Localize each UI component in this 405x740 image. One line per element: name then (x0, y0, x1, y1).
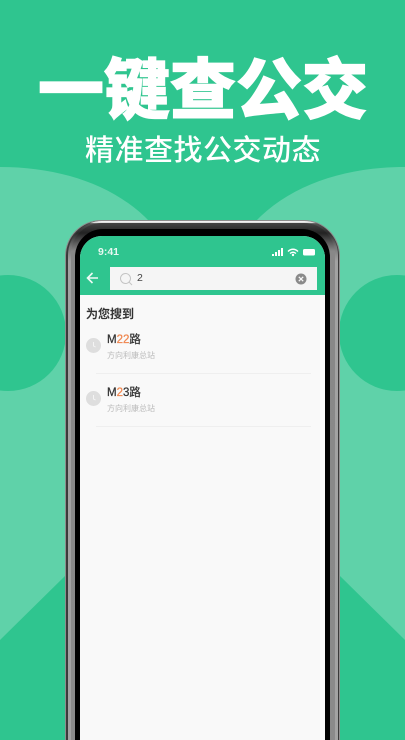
black bezel (75, 229, 330, 740)
divider (96, 373, 311, 374)
inner stripe (70, 223, 334, 740)
search box (110, 267, 317, 290)
route name: M23路 (107, 387, 141, 399)
subtitle: 精准查找公交动态 (85, 135, 321, 167)
screen (80, 236, 325, 740)
route name: M22路 (107, 334, 141, 346)
status icons (272, 248, 315, 256)
clock icon (86, 391, 101, 406)
result 2 (86, 386, 311, 427)
results heading: 为您搜到 (86, 307, 134, 321)
clear icon (296, 274, 306, 284)
outer dark rim (66, 221, 339, 740)
metal band (68, 221, 338, 740)
title: 一键查公交 (38, 53, 368, 127)
phone (65, 220, 340, 740)
clock icon (86, 338, 101, 353)
status time: 9:41 (98, 246, 119, 258)
direction: 方向利康总站 (107, 404, 155, 413)
search icon (120, 273, 132, 286)
result 1 (86, 333, 311, 374)
divider (96, 426, 311, 427)
direction: 方向利康总站 (107, 351, 155, 360)
green header (80, 236, 325, 295)
back arrow (86, 272, 98, 284)
search text: 2 (137, 272, 143, 284)
